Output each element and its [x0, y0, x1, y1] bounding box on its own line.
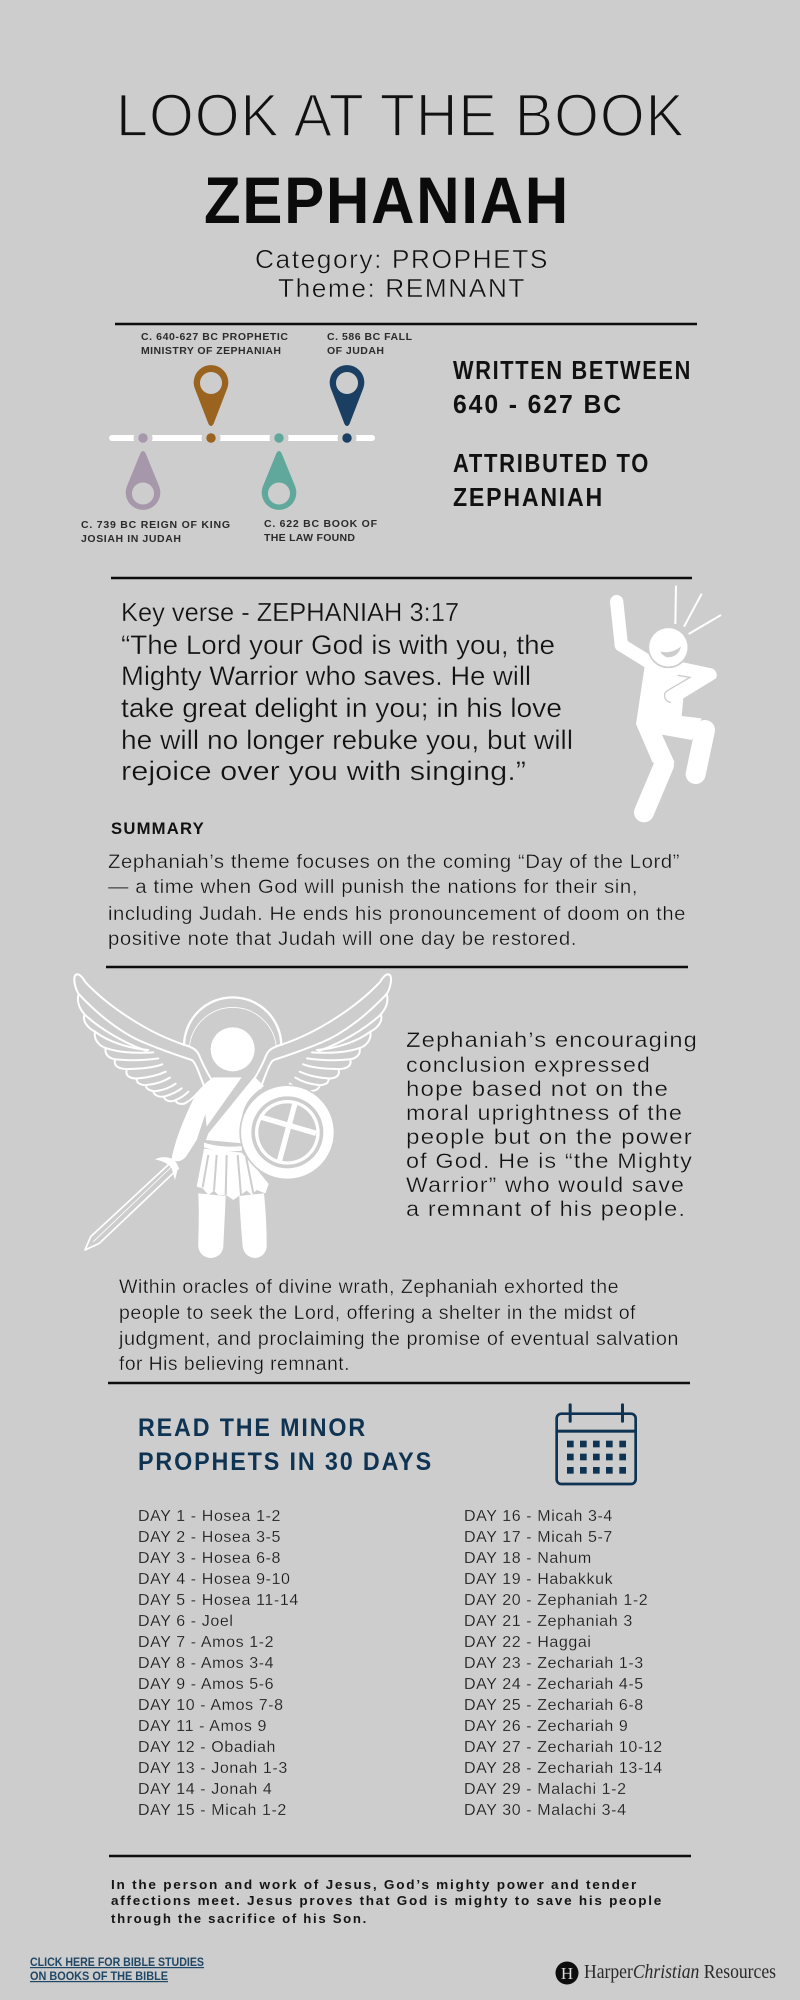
heading: summary: SUMMARY [111, 820, 205, 838]
subtitle: category and theme: Theme: REMNANT [278, 273, 526, 303]
text: encouraging conclusion: hope based not on the [406, 1078, 669, 1101]
subtitle: category and theme: Category: PROPHETS [255, 244, 549, 274]
reading plan: days 16-30 [464, 1508, 663, 1819]
key verse: rejoice over you with singing.” [121, 756, 526, 786]
link: bible studies: ON BOOKS OF THE BIBLE [30, 1969, 168, 1983]
text: oracles of divine wrath: Within oracles of divine wrath, Zephaniah exhorted the [119, 1277, 619, 1298]
reading plan: days 16-30: DAY 26 - Zechariah 9 [464, 1718, 628, 1735]
heading: Zephaniah: ZEPHANIAH [204, 163, 570, 237]
link: bible studies [30, 1955, 204, 1983]
key verse [121, 597, 573, 786]
reading plan: days 1-15: DAY 2 - Hosea 3-5 [138, 1529, 281, 1546]
reading plan: days 16-30: DAY 16 - Micah 3-4 [464, 1508, 613, 1525]
label: book of the law: THE LAW FOUND [264, 532, 355, 544]
label: prophetic ministry [141, 331, 288, 357]
icon: mighty warrior angel [74, 974, 391, 1258]
halo [184, 997, 281, 1047]
reading plan: days 16-30: DAY 25 - Zechariah 6-8 [464, 1697, 644, 1714]
facts: date and author [453, 355, 692, 512]
facts: date and author: ZEPHANIAH [453, 482, 604, 512]
reading plan: days 16-30: DAY 23 - Zechariah 1-3 [464, 1655, 644, 1672]
text: oracles of divine wrath: for His believing remnant. [119, 1354, 350, 1375]
text: encouraging conclusion [406, 1029, 698, 1221]
reading plan: days 1-15: DAY 14 - Jonah 4 [138, 1781, 272, 1798]
shield [239, 1084, 335, 1180]
closing statement: In the person and work of Jesus, God’s mighty power and tender [111, 1878, 638, 1892]
reading plan: days 16-30: DAY 21 - Zephaniah 3 [464, 1613, 633, 1630]
facts: date and author: WRITTEN BETWEEN [453, 355, 692, 385]
reading plan: days 16-30: DAY 30 - Malachi 3-4 [464, 1802, 627, 1819]
closing statement: affections meet. Jesus proves that God is mighty to save his people [111, 1894, 663, 1908]
timeline markers [134, 428, 356, 448]
text: oracles of divine wrath: people to seek the Lord, offering a shelter in the midst of [119, 1303, 636, 1324]
summary paragraph: Zephaniah’s theme focuses on the coming “Day of the Lord” [108, 852, 680, 873]
reading plan: days 16-30: DAY 27 - Zechariah 10-12 [464, 1739, 663, 1756]
reading plan: days 1-15: DAY 13 - Jonah 1-3 [138, 1760, 288, 1777]
key verse: take great delight in you; in his love [121, 693, 562, 723]
sword [85, 1157, 178, 1250]
facts: date and author: 640 - 627 BC [453, 389, 623, 419]
reading plan: days 16-30: DAY 17 - Micah 5-7 [464, 1529, 613, 1546]
reading plan: days 1-15: DAY 8 - Amos 3-4 [138, 1655, 274, 1672]
key verse: Key verse - ZEPHANIAH 3:17 [121, 597, 459, 627]
summary paragraph [108, 852, 686, 950]
pin: book of the law found [262, 451, 296, 510]
key verse: “The Lord your God is with you, the [121, 630, 555, 660]
reading plan: days 1-15: DAY 4 - Hosea 9-10 [138, 1571, 291, 1588]
text: encouraging conclusion: people but on the power [406, 1126, 693, 1149]
reading plan: days 16-30: DAY 19 - Habakkuk [464, 1571, 614, 1588]
text: oracles of divine wrath [118, 1277, 679, 1375]
reading plan: days 16-30: DAY 28 - Zechariah 13-14 [464, 1760, 663, 1777]
link: bible studies: CLICK HERE FOR BIBLE STUDIES [30, 1955, 204, 1969]
heading: read the minor prophets: READ THE MINOR [138, 1414, 367, 1442]
text: encouraging conclusion: a remnant of his people. [406, 1198, 686, 1221]
title: look at the book: LOOK AT THE BOOK [116, 82, 685, 149]
reading plan: days 16-30: DAY 24 - Zechariah 4-5 [464, 1676, 644, 1693]
reading plan: days 1-15: DAY 11 - Amos 9 [138, 1718, 267, 1735]
summary paragraph: positive note that Judah will one day be restored. [108, 929, 577, 950]
text: encouraging conclusion: of God. He is “the Mighty [406, 1150, 693, 1173]
subtitle: category and theme [255, 244, 549, 303]
label: reign of Josiah: JOSIAH IN JUDAH [81, 533, 181, 545]
timeline bar [112, 435, 372, 441]
logo: HarperChristian Resources: HarperChristian Resources [584, 1961, 776, 1983]
skirt [197, 1149, 269, 1200]
key verse: Mighty Warrior who saves. He will [121, 661, 531, 691]
reading plan: days 1-15 [138, 1508, 299, 1819]
label: prophetic ministry: MINISTRY OF ZEPHANIAH [141, 345, 281, 357]
label: reign of Josiah: C. 739 BC REIGN OF KING [81, 519, 230, 531]
label: book of the law [264, 518, 378, 544]
label: book of the law: C. 622 BC BOOK OF [264, 518, 378, 530]
text: encouraging conclusion: Warrior” who would save [406, 1174, 685, 1197]
summary paragraph: including Judah. He ends his pronouncement of doom on the [108, 904, 686, 925]
key verse: he will no longer rebuke you, but will [121, 725, 573, 755]
closing statement: through the sacrifice of his Son. [111, 1912, 368, 1926]
pin: prophetic ministry [194, 365, 228, 426]
reading plan: days 16-30: DAY 18 - Nahum [464, 1550, 592, 1567]
text: oracles of divine wrath: judgment, and proclaiming the promise of eventual salvation [118, 1329, 679, 1350]
icon: dancing figure [617, 586, 721, 812]
facts: date and author: ATTRIBUTED TO [453, 448, 650, 478]
summary paragraph: — a time when God will punish the nations for their sin, [108, 877, 638, 898]
reading plan: days 1-15: DAY 1 - Hosea 1-2 [138, 1508, 281, 1525]
text: encouraging conclusion: conclusion expressed [406, 1054, 651, 1077]
reading plan: days 16-30: DAY 20 - Zephaniah 1-2 [464, 1592, 648, 1609]
reading plan: days 1-15: DAY 5 - Hosea 11-14 [138, 1592, 299, 1609]
wings [74, 974, 391, 1104]
reading plan: days 1-15: DAY 7 - Amos 1-2 [138, 1634, 274, 1651]
label: prophetic ministry: C. 640-627 BC PROPHETIC [141, 331, 288, 343]
reading plan: days 1-15: DAY 6 - Joel [138, 1613, 234, 1630]
logo: HarperChristian Resources: H [561, 1964, 573, 1983]
label: fall of Judah: OF JUDAH [327, 345, 384, 357]
heading: read the minor prophets [138, 1414, 433, 1476]
icon: calendar [557, 1403, 636, 1484]
reading plan: days 1-15: DAY 9 - Amos 5-6 [138, 1676, 274, 1693]
reading plan: days 1-15: DAY 12 - Obadiah [138, 1739, 276, 1756]
head and body [172, 1027, 267, 1258]
label: reign of Josiah [81, 519, 230, 545]
pin: reign of Josiah [126, 451, 160, 510]
closing statement [111, 1878, 663, 1926]
reading plan: days 16-30: DAY 29 - Malachi 1-2 [464, 1781, 627, 1798]
reading plan: days 16-30: DAY 22 - Haggai [464, 1634, 592, 1651]
timeline chart [81, 331, 413, 545]
label: fall of Judah [327, 331, 413, 357]
heading: read the minor prophets: PROPHETS IN 30 DAYS [138, 1448, 433, 1476]
label: fall of Judah: C. 586 BC FALL [327, 331, 413, 343]
pin: fall of Judah [330, 365, 364, 426]
reading plan: days 1-15: DAY 3 - Hosea 6-8 [138, 1550, 281, 1567]
reading plan: days 1-15: DAY 10 - Amos 7-8 [138, 1697, 284, 1714]
reading plan: days 1-15: DAY 15 - Micah 1-2 [138, 1802, 287, 1819]
text: encouraging conclusion: Zephaniah’s encouraging [406, 1029, 698, 1052]
text: encouraging conclusion: moral uprightness of the [406, 1102, 683, 1125]
